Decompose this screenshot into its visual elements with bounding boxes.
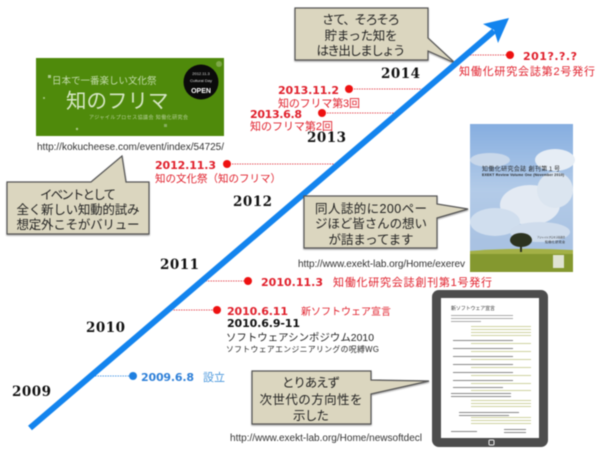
event: founding: 2009.6.8 — [141, 371, 194, 384]
event: new software declaration: ソフトウェアエンジニアリングの呪縛WG — [226, 344, 379, 354]
url: journal page: http://www.exekt-lab.org/Home/exerev — [298, 259, 465, 270]
callout: time to output knowledge: はき出しましょう — [316, 44, 406, 58]
callout: new intellectual attempt — [7, 156, 149, 234]
event: founding: 設立 — [203, 370, 225, 384]
event: flea market 3: 2013.11.2 — [278, 84, 339, 97]
year labels: 2013 — [307, 130, 346, 146]
event: flea market 3 — [278, 84, 360, 110]
event: journal issue 2: 201?.?.? — [523, 50, 577, 63]
event: culture festival: 2012.11.3 — [155, 159, 216, 172]
callout: direction for next generation — [252, 371, 429, 424]
event: flea market 2: 2013.6.8 — [250, 108, 302, 121]
event: new software declaration: ソフトウェアシンポジウム2010 — [226, 332, 374, 344]
event: new software declaration: 2010.6.11 — [227, 305, 288, 318]
magazine cover image: 知働化研究会誌 創刊第１号 — [482, 165, 560, 173]
url: declaration page: http://www.exekt-lab.org/Home/newsoftdecl — [230, 433, 422, 444]
tablet with declaration document — [432, 290, 548, 447]
year labels: 2012 — [233, 194, 272, 210]
callout: direction for next generation: 示した — [293, 409, 329, 423]
year labels: 2010 — [86, 320, 125, 336]
callout: new intellectual attempt: 想定外こそがバリュー — [16, 217, 140, 232]
event: journal issue 2 — [459, 50, 595, 78]
timeline arrow — [30, 18, 509, 428]
leader lines from timeline — [95, 55, 510, 376]
callout: direction for next generation: 次世代の方向性を — [260, 392, 362, 407]
url: event page: http://kokucheese.com/event/index/54725/ — [37, 142, 224, 153]
callout: new intellectual attempt: イベントとして — [40, 188, 116, 202]
event banner image: 知のフリマ: 2012.11.3 — [192, 71, 211, 76]
callout: 200 pages: ジほど皆さんの想い — [315, 216, 427, 231]
year labels — [12, 66, 420, 400]
callout: time to output knowledge: 貯まった知を — [324, 29, 398, 43]
event banner image: 知のフリマ: 知のフリマ — [66, 90, 168, 113]
event: flea market 2: 知のフリマ第2回 — [250, 119, 333, 133]
event banner image: 知のフリマ: アジャイルプロセス協議会 知働化研究会 — [89, 114, 188, 121]
event banner image: 知のフリマ: 日本で一番楽しい文化祭 — [52, 75, 157, 87]
callout: new intellectual attempt: 全く新しい知動的試み — [16, 202, 140, 217]
callout: 200 pages: が詰まってます — [328, 232, 414, 247]
event: flea market 3: 知のフリマ第3回 — [278, 96, 360, 110]
tablet with declaration document: 新ソフトウェア宣言 — [451, 305, 495, 312]
callout: time to output knowledge: さて、そろそろ — [322, 13, 400, 27]
callout: direction for next generation: とりあえず — [282, 376, 340, 390]
event: new software declaration: 2010.6.9-11 — [227, 317, 300, 330]
year labels: 2014 — [381, 66, 420, 82]
event: culture festival — [155, 159, 281, 185]
event banner image: 知のフリマ: Cultural Day — [190, 78, 212, 83]
event: journal issue 1 — [244, 275, 492, 289]
magazine cover image: EXEKT Review Volume One (November 2010) — [482, 173, 564, 177]
event: journal issue 2: 知働化研究会誌第2号発行 — [459, 64, 595, 78]
event: new software declaration — [213, 305, 391, 354]
year labels: 2009 — [12, 384, 51, 400]
event: journal issue 1: 2010.11.3 — [261, 276, 323, 289]
event: culture festival: 知の文化祭（知のフリマ） — [155, 172, 281, 185]
callout: time to output knowledge — [295, 8, 455, 63]
event banner image: 知のフリマ: OPEN — [191, 88, 211, 95]
magazine cover image — [470, 124, 575, 272]
event: flea market 2 — [250, 108, 333, 133]
event banner image: 知のフリマ — [36, 58, 224, 136]
event: founding — [129, 370, 225, 384]
callout: 200 pages — [304, 196, 468, 248]
magazine cover image: アジャイルプロセス協議会 — [537, 235, 566, 239]
event: new software declaration: 新ソフトウェア宣言 — [301, 305, 391, 318]
magazine cover image: 知働化研究会 — [545, 239, 565, 244]
year labels: 2011 — [160, 257, 199, 273]
event: journal issue 1: 知働化研究会誌創刊第1号発行 — [333, 275, 492, 289]
callout: 200 pages: 同人誌的に200ペー — [315, 201, 427, 216]
